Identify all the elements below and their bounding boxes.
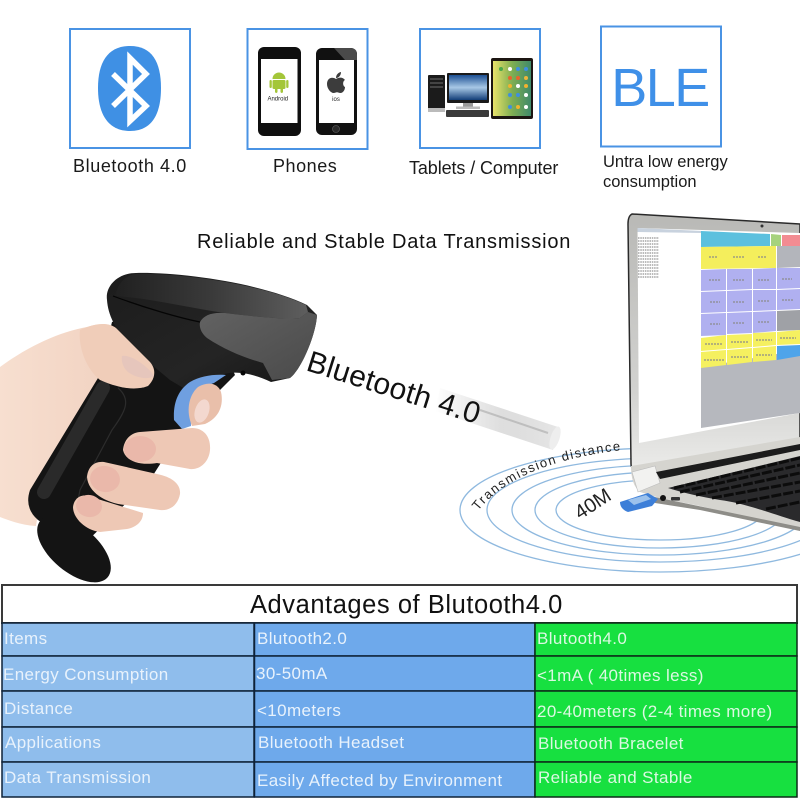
- laptop: screen: [638, 228, 800, 443]
- icon: desktop tower: [428, 75, 445, 112]
- icon card: tablets and computer: [409, 29, 558, 178]
- hand: index finger: [189, 384, 222, 426]
- label: 40M: 40M: [571, 485, 615, 524]
- icon: BLE letters: BLE: [611, 58, 709, 118]
- Blutooth 4.0 values: 20-40meters (2-4 times more): [537, 702, 772, 721]
- Blutooth 2.0 values: 30-50mA: [256, 664, 328, 683]
- row labels: Data Transmission: [4, 768, 151, 787]
- scanner: top seam: [113, 296, 200, 322]
- Blutooth 2.0 values: [256, 629, 502, 790]
- icon card: BLE: [601, 26, 728, 191]
- hand: palm: [0, 324, 158, 526]
- label: Untra low energy consumption: Untra low energy: [603, 153, 728, 171]
- signal beam: [435, 388, 563, 451]
- Blutooth 4.0 values: [537, 629, 772, 787]
- label: Untra low energy consumption: consumption: [603, 173, 697, 191]
- nail: ring: [88, 464, 122, 494]
- icon card: Bluetooth 4.0: [70, 29, 190, 176]
- scanner: top surface: [115, 274, 308, 319]
- hand: thumb: [80, 324, 154, 388]
- row labels: [3, 629, 169, 787]
- label: Bluetooth 4.0: Bluetooth 4.0: [73, 156, 187, 176]
- icon: bluetooth badge: [98, 46, 161, 131]
- laptop: hinge shadow: [656, 444, 800, 479]
- table title row: [2, 585, 797, 623]
- column: Blutooth 2.0: [254, 623, 535, 797]
- Blutooth 4.0 values: <1mA ( 40times less): [537, 666, 704, 685]
- laptop: deck: [631, 437, 800, 530]
- row labels: Energy Consumption: [3, 665, 169, 684]
- label: Bluetooth 4.0 on beam: Bluetooth 4.0: [303, 345, 485, 431]
- scanner: handle: [28, 300, 235, 548]
- laptop: [620, 214, 800, 531]
- heading: reliable and stable data transmission: Reliable and Stable Data Transmission: [197, 231, 571, 253]
- Blutooth 2.0 values: Blutooth2.0: [257, 629, 347, 648]
- signal rings: [460, 448, 800, 572]
- laptop: camera: [760, 224, 764, 228]
- hand and scanner: [0, 273, 317, 595]
- row labels: Items: [4, 629, 47, 648]
- row labels: Applications: [5, 733, 101, 752]
- nail: little: [74, 493, 104, 519]
- laptop: screen text list: [638, 238, 659, 277]
- icon: tablet: [491, 58, 533, 119]
- laptop: screen tile captions: [704, 257, 796, 360]
- icon: iOS phone: [316, 48, 357, 135]
- Blutooth 2.0 values: Bluetooth Headset: [258, 733, 404, 752]
- scanner: base pad: [26, 503, 122, 595]
- icon card: phones: [248, 29, 368, 176]
- laptop: ports: [660, 495, 680, 501]
- scanner: window port: [240, 370, 246, 376]
- hand: ring finger: [87, 462, 180, 510]
- label: Tablets / Computer: Tablets / Computer: [409, 158, 558, 178]
- scanner: gray panel: [200, 312, 317, 380]
- scanner: handle highlight: [44, 388, 103, 492]
- Blutooth 4.0 values: Bluetooth Bracelet: [538, 734, 684, 753]
- hand: little finger: [73, 496, 143, 532]
- Blutooth 2.0 values: Easily Affected by Environment: [257, 771, 502, 790]
- hand: middle finger: [123, 428, 210, 469]
- laptop: hinge: [632, 466, 660, 492]
- scanner: handle groove: [75, 388, 126, 515]
- nail: index: [192, 397, 212, 425]
- USB dongle: [620, 493, 658, 512]
- label: Untra low energy consumption: [603, 153, 728, 191]
- label: transmission distance: Transmission distance: [471, 444, 620, 508]
- laptop: keyboard: [668, 456, 800, 522]
- scanner: head: [107, 273, 317, 392]
- scanner: trigger: [174, 375, 226, 429]
- table title: Advantages of Blutooth4.0: [250, 591, 563, 619]
- laptop: trackpad front: [650, 496, 800, 531]
- Blutooth 2.0 values: <10meters: [257, 701, 341, 720]
- icon: Android phone: Android: [267, 96, 288, 102]
- laptop: keys: [674, 458, 800, 509]
- column: Blutooth 4.0: [535, 623, 797, 797]
- icon: iOS phone: ios: [332, 97, 340, 103]
- nail: thumb: [122, 356, 154, 378]
- row labels: Distance: [4, 699, 73, 718]
- label: Phones: Phones: [273, 156, 337, 176]
- icon: Android phone: [258, 47, 301, 136]
- column: items: [2, 623, 254, 797]
- icon: desktop monitor and keyboard: [446, 73, 489, 117]
- Blutooth 4.0 values: Reliable and Stable: [538, 768, 693, 787]
- comparison table: [2, 585, 797, 797]
- laptop: screen lid: [628, 214, 800, 468]
- nail: middle: [124, 436, 156, 462]
- Blutooth 4.0 values: Blutooth4.0: [537, 629, 627, 648]
